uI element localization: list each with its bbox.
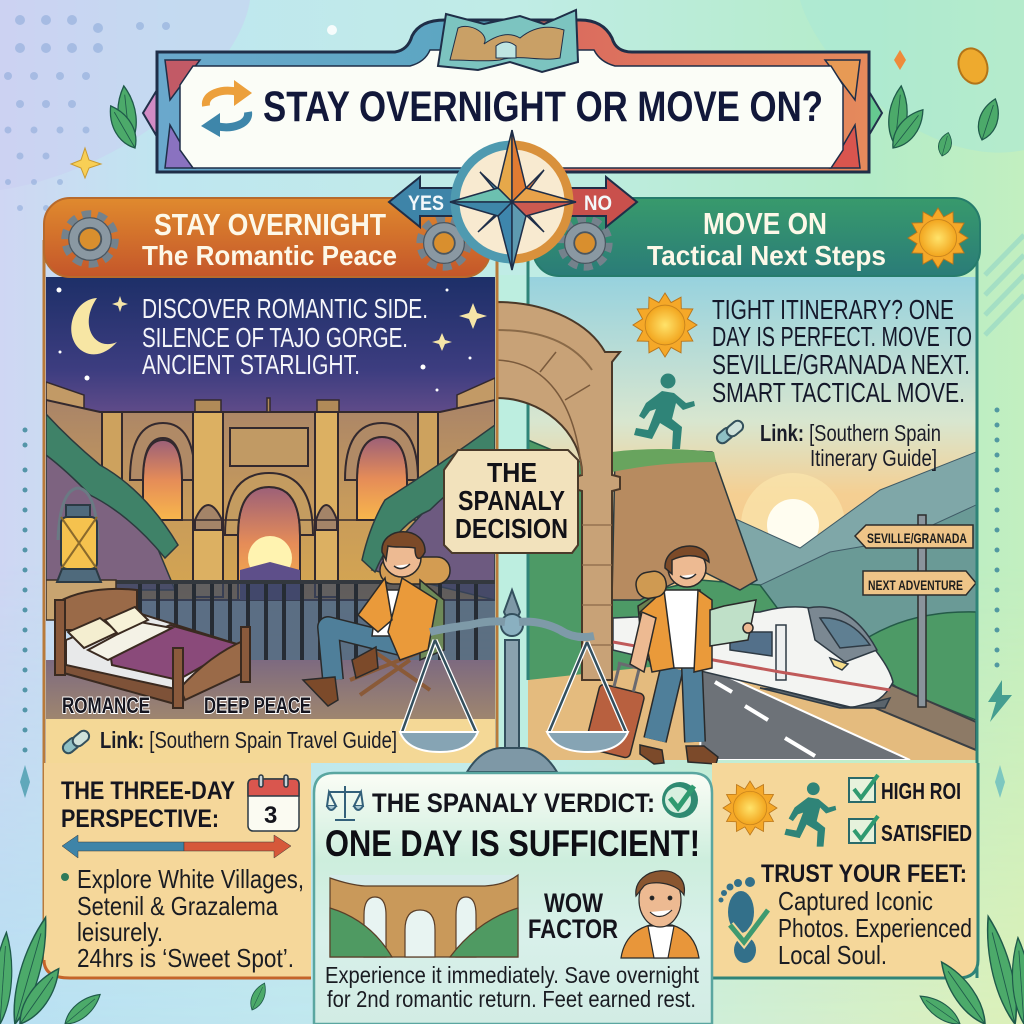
header subheading: Tactical Next Steps: [647, 240, 886, 271]
moon: [71, 298, 117, 354]
icon: chain link: [61, 729, 91, 755]
panel: verdict: [314, 773, 712, 1024]
sun and distant hill: [240, 536, 300, 600]
body text: leisurely.: [77, 917, 163, 947]
link text: Link: [Southern Spain Travel Guide]: [100, 727, 397, 753]
heading: THE THREE-DAY: [61, 777, 235, 805]
sky: [528, 277, 976, 760]
verdict body text: Experience it immediately. Save overnight: [325, 962, 700, 988]
sign text: [455, 457, 568, 544]
foliage bottom right: [916, 914, 1024, 1024]
traveller with suitcase and map: [584, 546, 756, 764]
night text: SILENCE OF TAJO GORGE.: [142, 322, 408, 353]
panel: move on scene: [528, 277, 976, 760]
icon: calendar: [248, 775, 299, 831]
panel: three-day perspective: [44, 763, 311, 978]
verdict body text: [325, 962, 700, 1012]
bridge arches: [101, 411, 439, 599]
side dot strips: [20, 235, 1024, 798]
icon: gear left: [66, 215, 114, 263]
banner white plate: [180, 50, 843, 168]
train: [613, 607, 893, 708]
night text: ANCIENT STARLIGHT.: [142, 349, 360, 380]
link strip: travel guide: [46, 719, 495, 763]
link: itinerary guide: Itinerary Guide]: [810, 445, 937, 471]
header subheading: The Romantic Peace: [142, 240, 397, 271]
bridge towers and spires: [195, 398, 339, 412]
bullet: [61, 873, 69, 881]
arrow: yes: [389, 177, 470, 227]
arrow: no: NO: [584, 192, 612, 215]
label: Deep Peace: DEEP PEACE: [204, 693, 311, 718]
label: Romance: ROMANCE: [62, 693, 150, 718]
heading: [61, 777, 235, 833]
body text: Photos. Experienced: [778, 913, 972, 943]
heading: PERSPECTIVE:: [61, 805, 219, 833]
body text: Local Soul.: [778, 940, 887, 970]
traveller portrait: [621, 871, 699, 958]
header heading: MOVE ON: [703, 206, 827, 241]
night sky: [46, 277, 495, 411]
forest: [528, 440, 976, 720]
icon: gear right: [421, 220, 467, 266]
panel outline: stay overnight: [44, 240, 497, 960]
header: move on: [533, 198, 980, 276]
body text: [77, 864, 304, 973]
heading: TRUST YOUR FEET:: [761, 860, 967, 888]
road: [700, 665, 910, 760]
wow factor text: FACTOR: [528, 914, 618, 944]
night text: [142, 298, 426, 374]
body text: Setenil & Grazalema: [77, 891, 278, 921]
balance scale: [400, 590, 628, 772]
arrow: no: [556, 177, 637, 227]
icon: runner: [784, 782, 836, 847]
icon: running figure: [634, 374, 695, 449]
title banner: [143, 10, 882, 172]
verdict body text: for 2nd romantic return. Feet earned rest.: [327, 986, 696, 1012]
corner houses: [46, 378, 495, 408]
panel: stay overnight scene: [46, 277, 495, 722]
verdict heading: THE SPANALY VERDICT:: [372, 788, 655, 818]
traveller resting in chair: [303, 532, 450, 706]
main verdict: ONE DAY IS SUFFICIENT!: [325, 823, 700, 864]
bridge illustration: [330, 875, 518, 957]
railway tracks: [874, 684, 976, 751]
sign text: SPANALY: [458, 485, 565, 516]
double arrow: [62, 835, 291, 858]
signpost: [855, 515, 976, 707]
text: itinerary advice: [712, 294, 972, 408]
foliage bottom left: [0, 915, 105, 1024]
ground: [528, 660, 976, 760]
night text: DISCOVER ROMANTIC SIDE.: [142, 293, 428, 324]
sign: Next adventure: NEXT ADVENTURE: [868, 577, 963, 593]
wow factor text: WOW: [544, 888, 603, 918]
check: satisfied: SATISFIED: [881, 820, 972, 846]
icon: sun: [633, 293, 697, 357]
bed: [55, 589, 250, 708]
arrow: yes: YES: [408, 192, 444, 215]
decision sign: [444, 450, 578, 553]
title text: STAY OVERNIGHT OR MOVE ON?: [263, 83, 823, 131]
link: itinerary guide: [715, 419, 941, 471]
terrace floor: [46, 660, 495, 722]
panel: trust your feet: [712, 763, 978, 978]
gap behind the arch: [497, 275, 528, 775]
icon: scales: [327, 786, 363, 820]
icon: check badge: [662, 782, 698, 818]
balcony railing: [116, 580, 495, 660]
body text: Explore White Villages,: [77, 864, 304, 894]
mountains: [720, 452, 976, 636]
stars: [56, 288, 487, 392]
cliff: [612, 451, 757, 600]
banner frame: [157, 20, 869, 172]
check: satisfied: [849, 816, 972, 846]
cliffs and greenery: [46, 414, 495, 600]
body text: 24hrs is ‘Sweet Spot’.: [77, 943, 294, 973]
bedside table: [46, 580, 116, 620]
icon: calendar: 3: [264, 802, 277, 829]
loose leaf: [247, 981, 270, 1012]
wow factor text: [528, 888, 618, 944]
icon: folded map: [438, 10, 578, 72]
check: high ROI: HIGH ROI: [881, 778, 961, 804]
decorative dot pattern, top left: [4, 15, 170, 211]
icon: sun: [908, 208, 968, 268]
stone arch: [497, 302, 620, 680]
body text: Captured Iconic: [778, 886, 933, 916]
link: itinerary guide: Link: [Southern Spain: [760, 420, 941, 446]
icon: sun: [723, 781, 777, 835]
banner side gems: [143, 80, 882, 147]
sign: Next adventure: [863, 571, 976, 595]
header: stay overnight: [44, 198, 490, 277]
compass: [450, 130, 576, 270]
icon: gear: [562, 220, 608, 266]
icon: footprint: [718, 877, 768, 963]
header heading: STAY OVERNIGHT: [154, 207, 386, 242]
sign: Seville/Granada: SEVILLE/GRANADA: [867, 530, 967, 546]
bridge wall: [46, 400, 495, 600]
sign text: DECISION: [455, 513, 568, 544]
sign text: THE: [487, 457, 537, 488]
check: high ROI: [849, 775, 961, 804]
body text: [778, 886, 972, 970]
icon: refresh arrows: [201, 80, 252, 137]
sun glow: [741, 473, 844, 548]
sign: Seville/Granada: [855, 525, 973, 548]
decorative leaves and sparkles around the title: [71, 25, 1004, 178]
banner corner accents: [165, 60, 860, 168]
panel outline: move on: [528, 240, 977, 978]
icon: lantern: [57, 488, 101, 582]
